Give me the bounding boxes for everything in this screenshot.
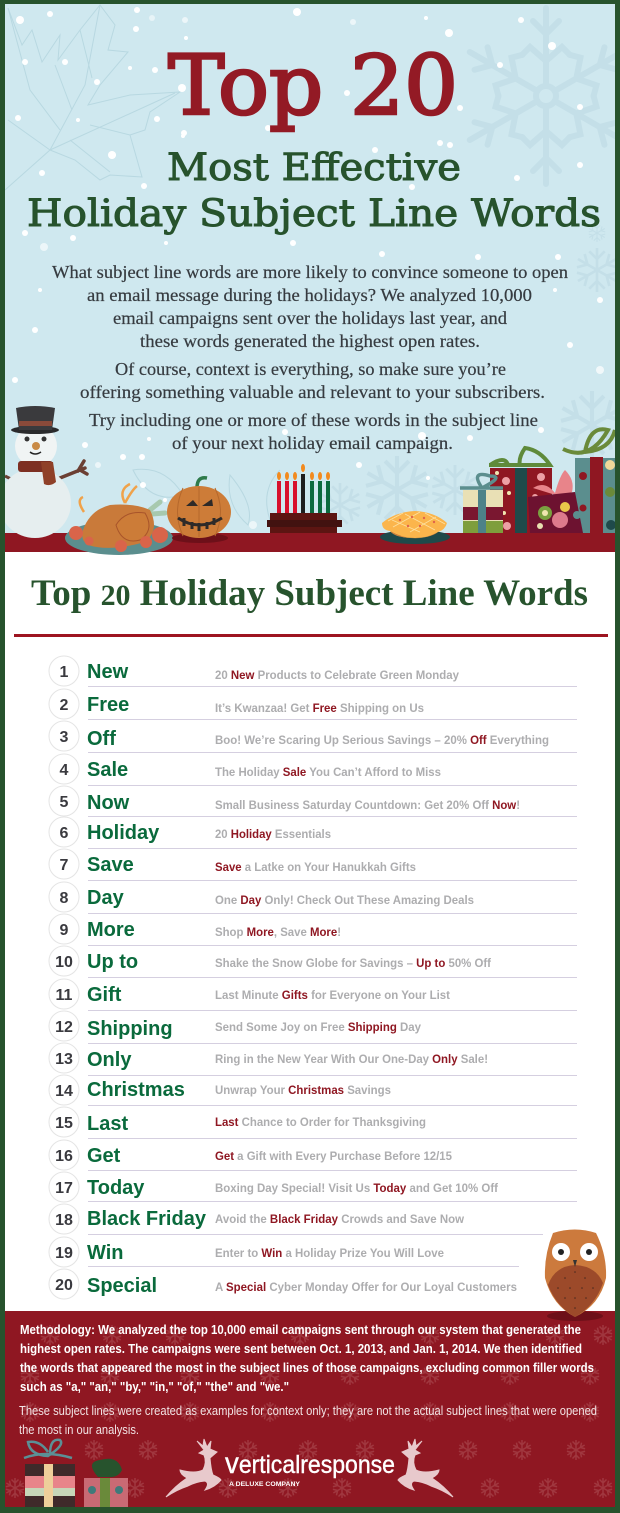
row 3 — [60, 728, 549, 750]
row 6: Holiday — [87, 822, 160, 844]
row 17: Today — [87, 1177, 145, 1199]
row 9: Shop More, Save More! — [215, 925, 341, 939]
row 12 — [55, 1018, 421, 1040]
intro text: these words generated the highest open rates. — [140, 331, 480, 351]
subtitle: Holiday Subject Line Words: Holiday Subject Line Words — [27, 192, 601, 235]
section rule — [14, 634, 608, 637]
row 15: 15 — [55, 1115, 73, 1132]
panel: winter sky header — [5, 4, 620, 534]
row 19: Enter to Win a Holiday Prize You Will Love — [215, 1246, 444, 1260]
row 1 — [60, 661, 459, 683]
row 15: Last — [87, 1113, 128, 1135]
row 2: It’s Kwanzaa! Get Free Shipping on Us — [215, 701, 424, 715]
row 18 — [55, 1208, 465, 1230]
row 12: Shipping — [87, 1018, 173, 1040]
intro text: offering something valuable and relevant to your subscribers. — [80, 382, 545, 402]
table shelf band — [5, 533, 615, 552]
row 20: 20 — [55, 1277, 73, 1294]
row 7: 7 — [60, 857, 69, 874]
icon: footer gifts — [24, 1440, 128, 1507]
section heading: Top 20 Holiday Subject Line Words — [31, 573, 588, 614]
row 13: Ring in the New Year With Our One-Day Only Sale! — [215, 1052, 488, 1066]
row 8: One Day Only! Check Out These Amazing Deals — [215, 893, 474, 907]
row 4: 4 — [60, 762, 69, 779]
row 6: 20 Holiday Essentials — [215, 827, 331, 841]
row 6: 6 — [60, 825, 69, 842]
row 7: Save — [87, 854, 134, 876]
row 7 — [60, 854, 416, 876]
row 16: 16 — [55, 1148, 73, 1165]
row 15: Last Chance to Order for Thanksgiving — [215, 1115, 426, 1129]
decoration: small snowflakes — [317, 224, 620, 527]
row 11: Gift — [87, 984, 122, 1006]
row 5: Small Business Saturday Countdown: Get 20% Off Now! — [215, 798, 520, 812]
row 17: 17 — [55, 1180, 73, 1197]
row 5: Now — [87, 792, 130, 814]
row 2 — [60, 694, 424, 716]
icon: left reindeer — [166, 1439, 221, 1497]
row 10: 10 — [55, 954, 73, 971]
row 3: Boo! We’re Scaring Up Serious Savings – 20% Off Everything — [215, 733, 549, 747]
row 16 — [55, 1145, 452, 1167]
icon: wrapped gifts — [460, 429, 616, 533]
disclaimer text — [19, 1404, 597, 1437]
intro text: What subject line words are more likely to convince someone to open — [52, 262, 568, 282]
row 4: The Holiday Sale You Can’t Afford to Miss — [215, 765, 441, 779]
intro text: email campaigns sent over the holidays last year, and — [113, 308, 507, 328]
row 18: Avoid the Black Friday Crowds and Save Now — [215, 1212, 465, 1226]
methodology text — [20, 1323, 594, 1394]
row 9: More — [87, 919, 135, 941]
main title: Top 20: Top 20 — [168, 39, 458, 134]
row 8: Day — [87, 887, 125, 909]
logo: A DELUXE COMPANY — [229, 1481, 301, 1488]
row 10: Up to — [87, 951, 138, 973]
row 17 — [55, 1177, 499, 1199]
row 1: 1 — [60, 664, 69, 681]
decoration: falling snow — [12, 7, 604, 529]
row 10: Shake the Snow Globe for Savings – Up to 50% Off — [215, 956, 492, 970]
row 11: Last Minute Gifts for Everyone on Your List — [215, 988, 450, 1002]
row 7: Save a Latke on Your Hanukkah Gifts — [215, 860, 416, 874]
row 19 — [55, 1242, 444, 1264]
intro text: Of course, context is everything, so make sure you’re — [115, 359, 506, 379]
row 18: 18 — [55, 1212, 73, 1229]
row 20 — [55, 1275, 517, 1297]
row 1: 20 New Products to Celebrate Green Monday — [215, 668, 459, 682]
row 3: 3 — [60, 729, 69, 746]
row 8 — [60, 887, 474, 909]
row 16: Get — [87, 1145, 121, 1167]
row 11 — [56, 984, 450, 1006]
icon: kinara candles — [267, 464, 342, 533]
row 12: 12 — [55, 1019, 73, 1036]
intro text: an email message during the holidays? We analyzed 10,000 — [87, 285, 532, 305]
row 2: 2 — [60, 697, 69, 714]
row 19: Win — [87, 1242, 123, 1264]
disclaimer text: the most in our analysis. — [19, 1423, 139, 1437]
row 12: Send Some Joy on Free Shipping Day — [215, 1020, 421, 1034]
row 9: 9 — [60, 922, 69, 939]
row 14: Unwrap Your Christmas Savings — [215, 1083, 391, 1097]
row 13: 13 — [55, 1051, 73, 1068]
row 20: A Special Cyber Monday Offer for Our Loyal Customers — [215, 1280, 517, 1294]
row 2: Free — [87, 694, 129, 716]
ranked word list — [49, 656, 577, 1299]
subtitle: Most Effective: Most Effective — [167, 146, 461, 189]
row 14: 14 — [55, 1083, 73, 1100]
row 9 — [60, 919, 341, 941]
row 4 — [60, 759, 441, 781]
row 20: Special — [87, 1275, 157, 1297]
decoration: faint leaves — [133, 469, 280, 525]
row 5 — [60, 792, 520, 814]
intro text — [52, 262, 568, 453]
intro text: of your next holiday email campaign. — [172, 433, 453, 453]
methodology text: highest open rates. The campaigns were sent between Oct. 1, 2013, and Jan. 1, 2014. We then identified — [20, 1342, 582, 1356]
panel: methodology footer — [5, 1311, 615, 1507]
row 16: Get a Gift with Every Purchase Before 12/15 — [215, 1149, 452, 1163]
icon: snowman — [0, 406, 87, 538]
row 10 — [55, 951, 492, 973]
row 13 — [55, 1049, 488, 1071]
decoration: maple leaf — [5, 5, 180, 190]
icon: owl — [545, 1230, 606, 1321]
logo: verticalresponse — [225, 1447, 395, 1480]
row 3: Off — [87, 728, 116, 750]
row 13: Only — [87, 1049, 132, 1071]
row 5: 5 — [60, 794, 69, 811]
decoration: snowflake pattern — [5, 1325, 613, 1498]
methodology text: such as "a," "an," "by," "in," "of," "the" and "we." — [20, 1380, 289, 1394]
icon: pie — [380, 511, 450, 544]
row 6 — [60, 822, 331, 844]
intro text: Try including one or more of these words in the subject line — [89, 410, 538, 430]
row 14 — [55, 1079, 391, 1101]
row 14: Christmas — [87, 1079, 185, 1101]
icon: jack-o-lantern — [167, 478, 231, 543]
methodology text: Methodology: We analyzed the top 10,000 email campaigns sent through our system that generated the — [20, 1323, 581, 1337]
row 19: 19 — [55, 1245, 73, 1262]
row 11: 11 — [56, 987, 73, 1004]
row 4: Sale — [87, 759, 128, 781]
row 17: Boxing Day Special! Visit Us Today and Get 10% Off — [215, 1181, 499, 1195]
row 15 — [55, 1113, 426, 1135]
icon: right reindeer — [398, 1439, 453, 1497]
icon: roast turkey — [65, 484, 173, 555]
row 1: New — [87, 661, 129, 683]
row 8: 8 — [60, 890, 69, 907]
row 18: Black Friday — [87, 1208, 207, 1230]
decoration: large snowflake — [458, 8, 620, 184]
